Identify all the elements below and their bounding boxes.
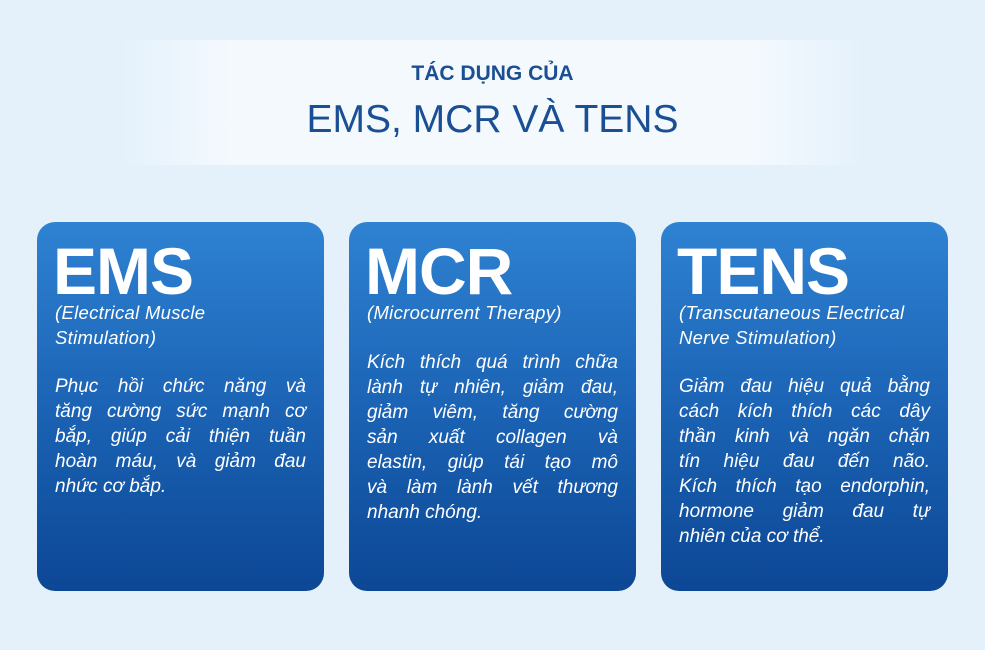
panel: TENS	[661, 222, 948, 591]
panel: MCR	[349, 222, 636, 591]
subtitle EMS: (Electrical Muscle	[55, 302, 205, 323]
heading EMS: EMS	[53, 234, 193, 308]
body MCR: elastin, giúp tái tạo mô	[367, 452, 618, 473]
panel: EMS	[37, 222, 324, 591]
body EMS: Phục hồi chức năng và	[55, 376, 306, 397]
body MCR: sản xuất collagen và	[367, 427, 618, 448]
body EMS: nhức cơ bắp.	[55, 476, 166, 497]
body EMS: tăng cường sức mạnh cơ	[55, 401, 306, 422]
subtitle TENS: Nerve Stimulation)	[679, 327, 837, 348]
title line 1: TÁC DỤNG CỦA	[411, 62, 574, 85]
body MCR: giảm viêm, tăng cường	[367, 402, 618, 423]
body EMS: hoàn máu, và giảm đau	[55, 451, 306, 472]
body MCR	[367, 352, 618, 523]
subtitle TENS: (Transcutaneous Electrical	[679, 302, 904, 323]
heading MCR: MCR	[365, 234, 512, 308]
title line 2: EMS, MCR VÀ TENS	[306, 98, 678, 141]
subtitle MCR: (Microcurrent Therapy)	[367, 302, 562, 323]
body TENS: thần kinh và ngăn chặn	[679, 426, 930, 447]
title banner	[120, 40, 865, 165]
subtitle EMS: Stimulation)	[55, 327, 156, 348]
body MCR: nhanh chóng.	[367, 502, 482, 523]
body MCR: Kích thích quá trình chữa	[367, 352, 618, 373]
body TENS: nhiên của cơ thể.	[679, 526, 825, 547]
body EMS: bắp, giúp cải thiện tuần	[55, 426, 306, 447]
body TENS: tín hiệu đau đến não.	[679, 451, 930, 472]
body TENS: hormone giảm đau tự	[679, 501, 930, 522]
subtitle TENS	[679, 302, 904, 348]
subtitle EMS	[55, 302, 205, 348]
body EMS	[55, 376, 308, 497]
body MCR: và làm lành vết thương	[367, 477, 618, 498]
body TENS: Kích thích tạo endorphin,	[679, 476, 930, 497]
body TENS	[679, 375, 932, 547]
body TENS: cách kích thích các dây	[679, 401, 930, 422]
heading TENS: TENS	[677, 234, 849, 308]
body TENS: Giảm đau hiệu quả bằng	[679, 376, 930, 397]
body MCR: lành tự nhiên, giảm đau,	[367, 377, 618, 398]
